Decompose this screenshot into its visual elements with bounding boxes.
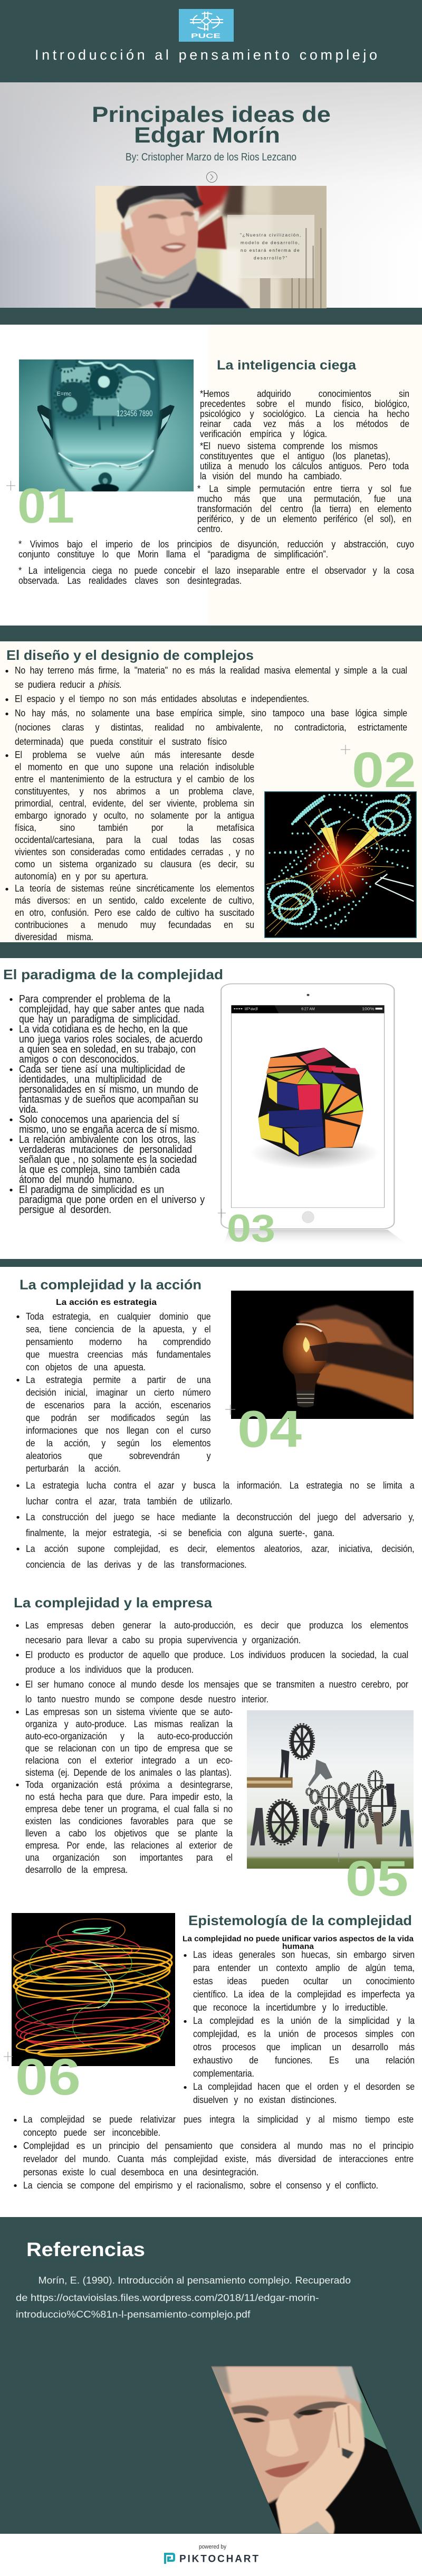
list: paradigma bullets: vida.	[19, 1104, 39, 1115]
list: paradigma bullets: identidades, una multiplicidad de	[19, 1074, 162, 1085]
image: hand holding lit bulb	[231, 1291, 414, 1419]
text: La inteligencia ciega no puede: * La inteligencia ciega no puede concebir el lazo inseparable entre el observador y la cosa	[18, 565, 414, 576]
text: Hemos adquirido: psicológico y sociológico. La ciencia ha hecho	[200, 409, 409, 419]
text: Hemos adquirido: precedentes sobre el mundo físico, biológico,	[200, 399, 409, 409]
title: Introducción al pensamiento complejo: Introducción al pensamiento complejo	[35, 47, 377, 63]
subheading: La acción es estrategia: La acción es estrategia	[56, 1298, 157, 1307]
heading: La complejidad y la empresa: La complejidad y la empresa	[14, 1595, 213, 1611]
section background: hero	[0, 82, 422, 308]
list: diseño narrow bullets: entre el mantenimiento de la estructura y el cambio de los	[15, 774, 254, 784]
list: epistemología narrow bullets: Las ideas generales son huecas, sin embargo sirven	[193, 1949, 414, 1960]
list: acción narrow bullets: decisión inicial, imaginar un cierto número	[25, 1387, 210, 1398]
list: epistemología narrow bullets: otros procesos que implican un desarrollo más	[193, 2042, 414, 2052]
subheading: La complejidad no puede unificar	[183, 1934, 414, 1951]
image: people and gears	[247, 1710, 414, 1869]
list: diseño wide bullets: No hay más, no solamente una base empírica simple, sino tampoco una base lógica simple	[15, 708, 407, 718]
list: diseño narrow bullets: vivientes son consideradas como entidades cerradas , y no	[15, 847, 254, 857]
list: paradigma bullets: mismo, uno se engaña acerca de sí mismo.	[19, 1124, 199, 1135]
list: empresa narrow bullets: que se relacionan con un tipo de empresa que se	[25, 1743, 233, 1754]
list: acción wide bullets: La acción supone complejidad, es decir, elementos aleatorios, azar, iniciativa, decisión,	[25, 1543, 414, 1554]
text: El nuevo sistema: *El nuevo sistema comprende los mismos	[200, 441, 378, 451]
list: acción narrow bullets: con objetos de una apuesta.	[25, 1362, 145, 1372]
heading: El paradigma de la complejidad: El paradigma de la complejidad	[3, 967, 223, 982]
list: diseño wide bullets: El espacio y el tiempo no son más entidades absolutas e independientes.	[15, 694, 309, 704]
footer: powered by Piktochart	[161, 2542, 261, 2568]
list: epistemología narrow bullets	[184, 1949, 415, 2105]
list: empresa narrow bullets: empresa debe tener un programa, el cual falla si no	[25, 1804, 233, 1814]
photo: Edgar Morin with cap and quote	[95, 186, 327, 308]
list: diseño narrow bullets: contribuciones a menudo muy fecundadas en su	[15, 920, 254, 930]
text: Hemos adquirido: *Hemos adquirido conocimientos sin	[200, 389, 409, 399]
list: paradigma bullets	[9, 993, 205, 1216]
divider band 1	[0, 308, 422, 325]
list: diseño narrow bullets: occidental/cartesiana, para la cual todas las cosas	[15, 835, 254, 845]
list: paradigma bullets: fantasmas y de sueños que acompañan su	[19, 1094, 198, 1105]
list: diseño wide bullets: No hay terreno más firme, la "materia" no es más la realidad masiva elemental y simple a la cual	[15, 665, 407, 676]
photo: Edgar Morin with cap and quote: desarrollo?"	[254, 255, 287, 260]
text: El nuevo sistema	[200, 441, 409, 481]
image: tablet with puzzle cube	[220, 983, 400, 1239]
list: diseño wide bullets: determinada) que pueda constituir el sustrato físico	[15, 736, 227, 747]
list: epistemología narrow bullets: La complejidad hacen que el orden y el desorden se	[193, 2081, 414, 2092]
list: acción wide bullets: finalmente, la mejor estrategia, -si se beneficia con alguna suerte-, gana.	[25, 1528, 334, 1538]
list: diseño narrow bullets: más diversos: en un sentido, caldo excelente de cultivo,	[15, 895, 254, 906]
list: epistemología wide bullets: La ciencia se compone del empirismo y el racionalismo, sobre el consenso y el conflicto.	[23, 2180, 378, 2191]
list: paradigma bullets: persigue al desorden.	[19, 1204, 111, 1216]
list: epistemología narrow bullets: La complejidad es la unión de la simplicidad y la	[193, 2015, 414, 2026]
list: acción narrow bullets	[16, 1311, 211, 1474]
footer: powered by Piktochart: powered by	[199, 2544, 226, 2550]
list: acción wide bullets	[16, 1480, 415, 1570]
logo: PUCE: PUCE	[191, 32, 220, 40]
heading: La inteligencia ciega: La inteligencia ciega	[217, 358, 357, 373]
list: paradigma bullets: la que es compleja, sino también cada	[19, 1164, 180, 1176]
section background: referencias	[0, 2217, 422, 2534]
image: particle collision	[264, 791, 417, 938]
heading: Principales ideas de Edgar Morín	[92, 102, 331, 147]
list: epistemología narrow bullets: disuelven y no existan distinciones.	[193, 2095, 336, 2105]
list: acción narrow bullets: Toda estrategia, en cualquier dominio que	[25, 1311, 210, 1322]
list: empresa narrow bullets: sistema (ej. Depende de los animales o las plantas).	[25, 1767, 232, 1778]
list: empresa narrow bullets: lleven a cabo los objetivos que se plante la	[25, 1828, 233, 1839]
text: reference citation: introduccio%CC%81n-l-pensamiento-complejo.pdf	[16, 2309, 251, 2319]
list: empresa narrow bullets: Las empresas son un sistema viviente que se auto-	[25, 1707, 233, 1717]
list: empresa narrow bullets: desarrollo de la empresa.	[25, 1864, 128, 1875]
text: La inteligencia ciega no puede	[18, 565, 415, 586]
image: spiral of light	[12, 1913, 175, 2066]
list: empresa narrow bullets: una organización son importantes para el	[25, 1852, 233, 1863]
list: empresa wide bullets	[16, 1620, 408, 1704]
text: reference citation: Morín, E. (1990). Introducción al pensamiento complejo. Recuperado	[38, 2275, 351, 2286]
list: acción wide bullets: La estrategia lucha contra el azar y busca la información. La estrategia no se limita a	[25, 1480, 414, 1491]
text: La simple permutación: periférico, y de un elemento periférico (el sol), en	[197, 514, 411, 524]
list: epistemología wide bullets: La complejidad se puede relativizar pues integra la simplicidad y al mismo tiempo este	[23, 2114, 413, 2125]
list: epistemología narrow bullets: científico. La idea de la complejidad es imperfecta ya	[193, 1989, 414, 2000]
heading: Epistemología de la complejidad: Epistemología de la complejidad	[188, 1912, 412, 1928]
text: El nuevo sistema: utiliza a menudo los cálculos antiguos. Pero toda	[200, 461, 409, 471]
list: acción narrow bullets: pensamiento moderno ha comprendido	[25, 1337, 210, 1347]
list: paradigma bullets: verdaderas mutaciones de personalidad	[19, 1144, 192, 1156]
divider band 2	[0, 626, 422, 641]
footer: powered by Piktochart: PIKTOCHART	[179, 2554, 258, 2565]
section background: inteligencia ciega	[0, 325, 422, 626]
list: epistemología wide bullets: concepto puede ser inconcebible.	[23, 2127, 160, 2138]
text: La simple permutación: * La simple permutación entre tierra y sol fue	[197, 484, 411, 494]
list: paradigma bullets: La relación ambivalente con los otros, las	[19, 1134, 196, 1145]
list: diseño narrow bullets: La teoría de sistemas reúne sincréticamente los elementos	[15, 883, 254, 894]
list: empresa narrow bullets: organiza y auto-produce. Las mismas realizan la	[25, 1719, 233, 1729]
logo: PUCE	[179, 9, 234, 42]
heading: Referencias: Referencias	[26, 2239, 145, 2260]
list: diseño narrow bullets: el momento en que uno supone una relación indisoluble	[15, 762, 254, 772]
list: acción narrow bullets: que podrán ser modificados según las	[25, 1413, 210, 1423]
list: empresa narrow bullets: relaciona con el exterior integrado a un eco-	[25, 1755, 233, 1766]
list: epistemología wide bullets: personas existe lo cual desemboca en una desintegración.	[23, 2167, 258, 2177]
subheading: La complejidad no puede unificar: La complejidad no puede unificar varios aspectos de la vida	[183, 1934, 414, 1944]
list: acción wide bullets: La construcción del juego se hace mediante la deconstrucción del juego del adversario y,	[25, 1512, 414, 1522]
divider band 4	[0, 1259, 422, 1267]
list: diseño wide bullets: (nociones claras y distintas, realidad no ambivalente, no contradictoria, estrictamente	[15, 722, 407, 733]
list: acción narrow bullets: de la acción, y según los elementos	[25, 1438, 210, 1448]
list: empresa narrow bullets: auto-eco-organización y la auto-eco-producción	[25, 1731, 233, 1741]
divider band 3	[0, 942, 422, 958]
list: paradigma bullets: complejidad, hay que saber antes que nada	[19, 1003, 204, 1015]
photo: Edgar Morin hand on cheek	[211, 2366, 422, 2534]
list: epistemología narrow bullets: que reconoce la incertidumbre y lo irreductible.	[193, 2002, 387, 2013]
list: epistemología narrow bullets: complejidad, es la unión de procesos simples con	[193, 2029, 414, 2039]
list: acción narrow bullets: perturbarán la acción.	[25, 1463, 120, 1474]
list: acción narrow bullets: informaciones que nos llegan con el curso	[25, 1425, 210, 1436]
list: paradigma bullets: paradigma que pone orden en el universo y	[19, 1194, 205, 1206]
list: acción wide bullets: luchar contra el azar, trata también de utilizarlo.	[25, 1496, 232, 1507]
list: epistemología wide bullets	[14, 2114, 414, 2191]
list: acción narrow bullets: de escenarios para la acción, escenarios	[25, 1400, 210, 1410]
text: Hemos adquirido: verificación empírica y lógica.	[200, 429, 327, 439]
text: La simple permutación: centro.	[197, 524, 223, 534]
list: epistemología narrow bullets: complementaria.	[193, 2068, 254, 2079]
list: empresa narrow bullets: Toda organización está próxima a desintegrarse,	[25, 1779, 233, 1790]
list: acción narrow bullets: La estrategia permite a partir de una	[25, 1375, 210, 1385]
list: diseño narrow bullets: diveresidad misma.	[15, 932, 93, 942]
list: acción narrow bullets: que muestra creencias más fundamentales	[25, 1349, 210, 1360]
text: Vivimos bajo el imperio: conjunto constituye lo que Morin llama el “paradigma de simplificación”.	[18, 549, 328, 560]
heading: Principales ideas de Edgar Morín: Edgar Morín	[134, 122, 280, 147]
list: epistemología narrow bullets: para entender un contexto amplio de algún tema,	[193, 1963, 414, 1973]
list: paradigma bullets: La vida cotidiana es de hecho, en la que	[19, 1024, 188, 1035]
list: diseño narrow bullets	[5, 750, 254, 942]
icon: circled arrow	[206, 172, 217, 183]
list: empresa narrow bullets: existen las condiciones favorables para que se	[25, 1816, 233, 1826]
list: diseño narrow bullets: física, sino también por la metafísica	[15, 822, 254, 833]
text: reference citation	[13, 2272, 356, 2323]
list: empresa wide bullets: necesario para llevar a cabo su propia supervivencia y organización.	[25, 1635, 301, 1645]
list: empresa wide bullets: produce a los individuos que la producen.	[25, 1664, 194, 1675]
list: empresa wide bullets: Las empresas deben generar la auto-producción, es decir que produzca los elementos	[25, 1620, 408, 1631]
list: paradigma bullets: a quien sea en soledad, en su trabajo, con	[19, 1044, 196, 1055]
list: diseño wide bullets: se pudiera reducir a phisis.	[15, 679, 122, 690]
list: acción wide bullets: conciencia de las derivas y de las transformaciones.	[25, 1559, 246, 1570]
list: empresa narrow bullets: no está hecha para que dure. Para impedir esto, la	[25, 1792, 233, 1802]
photo: Edgar Morin with cap and quote: no estará enferma de	[241, 248, 300, 253]
photo: Edgar Morin with cap and quote: modelo de desarrollo,	[241, 240, 300, 245]
list: acción narrow bullets: sea, tiene conciencia de la apuesta, y el	[25, 1324, 210, 1334]
text: La simple permutación: mucho más que una permutación, fue una	[197, 494, 411, 504]
text: Vivimos bajo el imperio	[18, 539, 414, 560]
text: reference citation: de https://octavioislas.files.wordpress.com/2018/11/edgar-morin-	[16, 2293, 319, 2303]
list: empresa narrow bullets: empresa. Por ende, las relaciones al exterior de	[25, 1840, 233, 1851]
image: tablet with puzzle cube: 6:27 AM	[301, 1007, 315, 1011]
list: diseño narrow bullets: El problema se vuelve aún más interesante desde	[15, 750, 254, 760]
list: diseño narrow bullets: constituyentes, y nos abrimos a un problema clave,	[15, 786, 254, 797]
list: paradigma bullets: personalidades en sí mismo, un mundo de	[19, 1084, 198, 1095]
text: Hemos adquirido: reinar cada vez más a los métodos de	[200, 419, 409, 429]
list: paradigma bullets: amigos o con desconocidos.	[19, 1054, 139, 1065]
image: head with gears	[19, 359, 194, 491]
text: La simple permutación: transformación del centro (la tierra) en elemento	[197, 504, 411, 514]
list: paradigma bullets: uno juega varios roles sociales, de acuerdo	[19, 1034, 203, 1045]
list: diseño narrow bullets: embargo ignorado y oculto, no solamente por la antigua	[15, 810, 254, 821]
list: paradigma bullets: El paradigma de simplicidad es un	[19, 1184, 164, 1196]
list: paradigma bullets: señalan que , no solamente es la sociedad	[19, 1154, 197, 1166]
text: El nuevo sistema: la visión del mundo ha cambiado.	[200, 471, 342, 481]
list: diseño narrow bullets: primordial, central, evidente, del ser viviente, problema sin	[15, 798, 254, 809]
list: empresa wide bullets: El producto es productor de aquello que produce. Los individuos producen la sociedad, la cual	[25, 1650, 408, 1660]
image: head with gears: E=mc	[57, 391, 72, 397]
heading: Principales ideas de Edgar Morín: Principales ideas de	[92, 102, 331, 127]
image: head with gears: 123456 7890	[117, 409, 152, 418]
list: diseño narrow bullets: autonomía) en y por su apertura.	[15, 871, 148, 882]
list: paradigma bullets: Para comprender el problema de la	[19, 993, 170, 1005]
list: diseño wide bullets	[5, 665, 407, 747]
list: epistemología wide bullets: revelador del mundo. Cuanta más complejidad existe, más diversidad de interacciones entre	[23, 2154, 413, 2164]
list: diseño narrow bullets: en otro, confusión. Pero ese caldo de cultivo ha suscitado	[15, 907, 254, 918]
list: acción narrow bullets: aleatorios que sobrevendrán y	[25, 1451, 210, 1461]
photo: Edgar Morin with cap and quote: "¿Nuestra civilización,	[240, 232, 301, 238]
list: paradigma bullets: que hay un paradigma de simplicidad.	[19, 1014, 180, 1025]
text: Vivimos bajo el imperio: * Vivimos bajo el imperio de los principios de disyunción, reducción y abstracción, cuyo	[18, 539, 414, 550]
image: tablet with puzzle cube: 100%	[362, 1007, 375, 1011]
text: La simple permutación	[197, 484, 411, 534]
list: diseño narrow bullets: como un sistema organizado su clausura (es decir, su	[15, 859, 254, 869]
section background: header band	[0, 0, 422, 82]
list: paradigma bullets: átomo del mundo humano.	[19, 1174, 135, 1186]
section background: diseño y designio	[0, 641, 422, 942]
subheading: La complejidad no puede unificar: humana	[282, 1942, 314, 1951]
list: empresa wide bullets: lo tanto nuestro mundo se compone desde nuestro interior.	[25, 1694, 268, 1704]
heading: El diseño y el designio de complejos: El diseño y el designio de complejos	[6, 647, 254, 663]
list: epistemología narrow bullets: estas ideas pueden ocultar un conocimiento	[193, 1976, 414, 1986]
image: tablet with puzzle cube: •••• iPad	[234, 1007, 258, 1011]
list: paradigma bullets: Solo conocemos una apariencia del sí	[19, 1114, 179, 1125]
list: epistemología wide bullets: Complejidad es un principio del pensamiento que considera al mundo mas no el principio	[23, 2141, 413, 2151]
text: El nuevo sistema: constituyentes que el antiguo (los planetas),	[200, 451, 390, 461]
list: empresa narrow bullets	[16, 1707, 233, 1875]
heading: La complejidad y la acción: La complejidad y la acción	[20, 1276, 202, 1292]
list: paradigma bullets: Cada ser tiene así una multiplicidad de	[19, 1064, 185, 1075]
list: epistemología narrow bullets: exhaustivo de funciones. Es una relación	[193, 2055, 414, 2066]
text: La inteligencia ciega no puede: observada. Las realidades claves son desintegradas.	[18, 575, 242, 586]
list: empresa wide bullets: El ser humano conoce al mundo desde los mensajes que se transmiten a nuestro cerebro, por	[25, 1679, 408, 1690]
text: Hemos adquirido	[200, 389, 409, 439]
